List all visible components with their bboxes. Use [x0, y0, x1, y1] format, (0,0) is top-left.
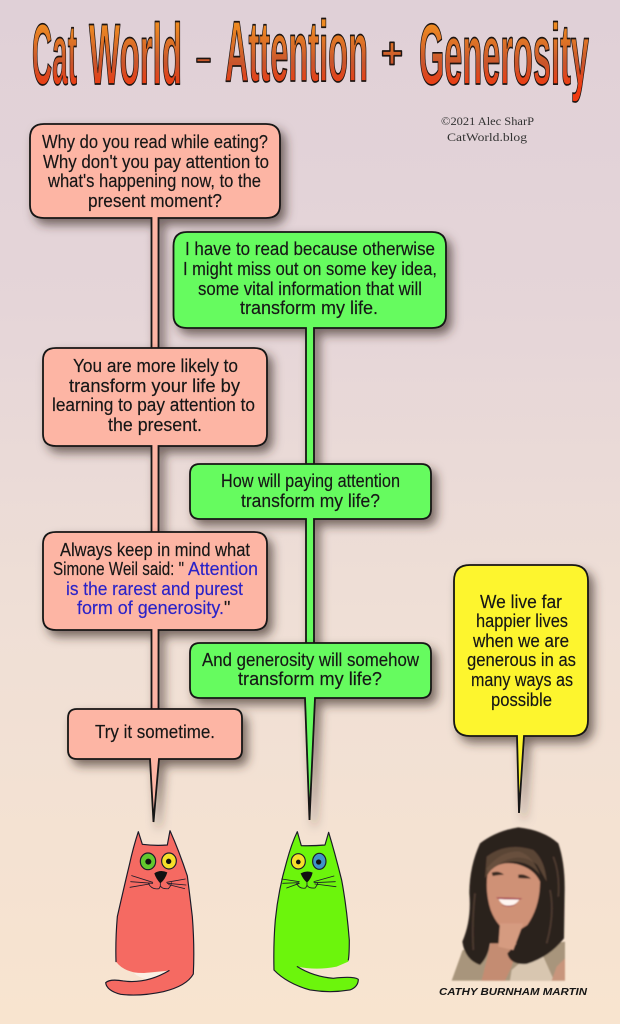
bubble: yellow author quote: We live far: [480, 592, 562, 612]
icon: red cat: [106, 831, 194, 995]
bubble: Simone Weil quote: Always keep in mind what: [60, 540, 250, 560]
bubble: I have to read: transform my life.: [240, 298, 378, 318]
bubble: yellow author quote: [454, 565, 588, 813]
bubble: and generosity: And generosity will somehow: [202, 650, 420, 670]
title: Attention: [225, 4, 368, 100]
bubble: try it sometime: [68, 709, 242, 822]
copyright credit: ©2021 Alec SharP: [441, 114, 534, 128]
bubble: why do you read: Why do you read while eating?: [42, 132, 268, 152]
bubble: why do you read: what's happening now, to the: [47, 171, 261, 191]
title: +: [381, 29, 403, 78]
bubble: why do you read: [30, 124, 280, 360]
title: [32, 4, 589, 103]
bubble: yellow author quote: many ways as: [471, 670, 573, 690]
bubble: Simone Weil quote: Simone Weil said: ": [53, 559, 184, 579]
bubble: I have to read: [174, 232, 446, 475]
bubble: how will paying attention: How will paying attention: [221, 471, 400, 491]
bubble: you are more likely: learning to pay attention to: [52, 395, 255, 415]
bubble: yellow author quote: possible: [491, 690, 552, 710]
title: World: [89, 7, 182, 103]
bubble: you are more likely: the present.: [108, 415, 202, 435]
bubble: you are more likely: transform your life by: [69, 376, 240, 396]
bubble: you are more likely: [43, 348, 267, 545]
title: –: [196, 37, 211, 78]
bubble: you are more likely: You are more likely to: [73, 356, 238, 376]
bubble: yellow author quote: happier lives: [476, 611, 568, 631]
bubble: and generosity: [190, 643, 431, 820]
copyright credit: CatWorld.blog: [447, 130, 527, 144]
title: Cat: [32, 7, 77, 103]
bubble: Simone Weil quote: ": [224, 598, 230, 618]
bubble: Simone Weil quote: [43, 532, 267, 720]
icon: green cat: [274, 832, 358, 992]
bubble: why do you read: Why don't you pay attention to: [43, 152, 269, 172]
bubble: yellow author quote: generous in as: [467, 650, 576, 670]
bubble: Simone Weil quote: Attention: [188, 559, 258, 579]
bubble: and generosity: transform my life?: [238, 669, 382, 689]
copyright credit: [441, 114, 534, 144]
bubble: Simone Weil quote: is the rarest and purest: [66, 579, 243, 599]
bubble: I have to read: I might miss out on some key idea,: [183, 259, 437, 279]
photo: Cathy Burnham Martin: [452, 827, 565, 981]
bubble: how will paying attention: [190, 464, 431, 655]
photo caption: CATHY BURNHAM MARTIN: [439, 986, 587, 998]
bubble: yellow author quote: when we are: [472, 631, 569, 651]
bubble: Simone Weil quote: form of generosity.: [77, 598, 224, 618]
bubble: I have to read: some vital information that will: [198, 279, 422, 299]
bubble: why do you read: present moment?: [88, 191, 222, 211]
bubble: how will paying attention: transform my life?: [241, 491, 380, 511]
bubble: try it sometime: Try it sometime.: [95, 722, 215, 742]
bubble: I have to read: I have to read because otherwise: [185, 239, 435, 259]
